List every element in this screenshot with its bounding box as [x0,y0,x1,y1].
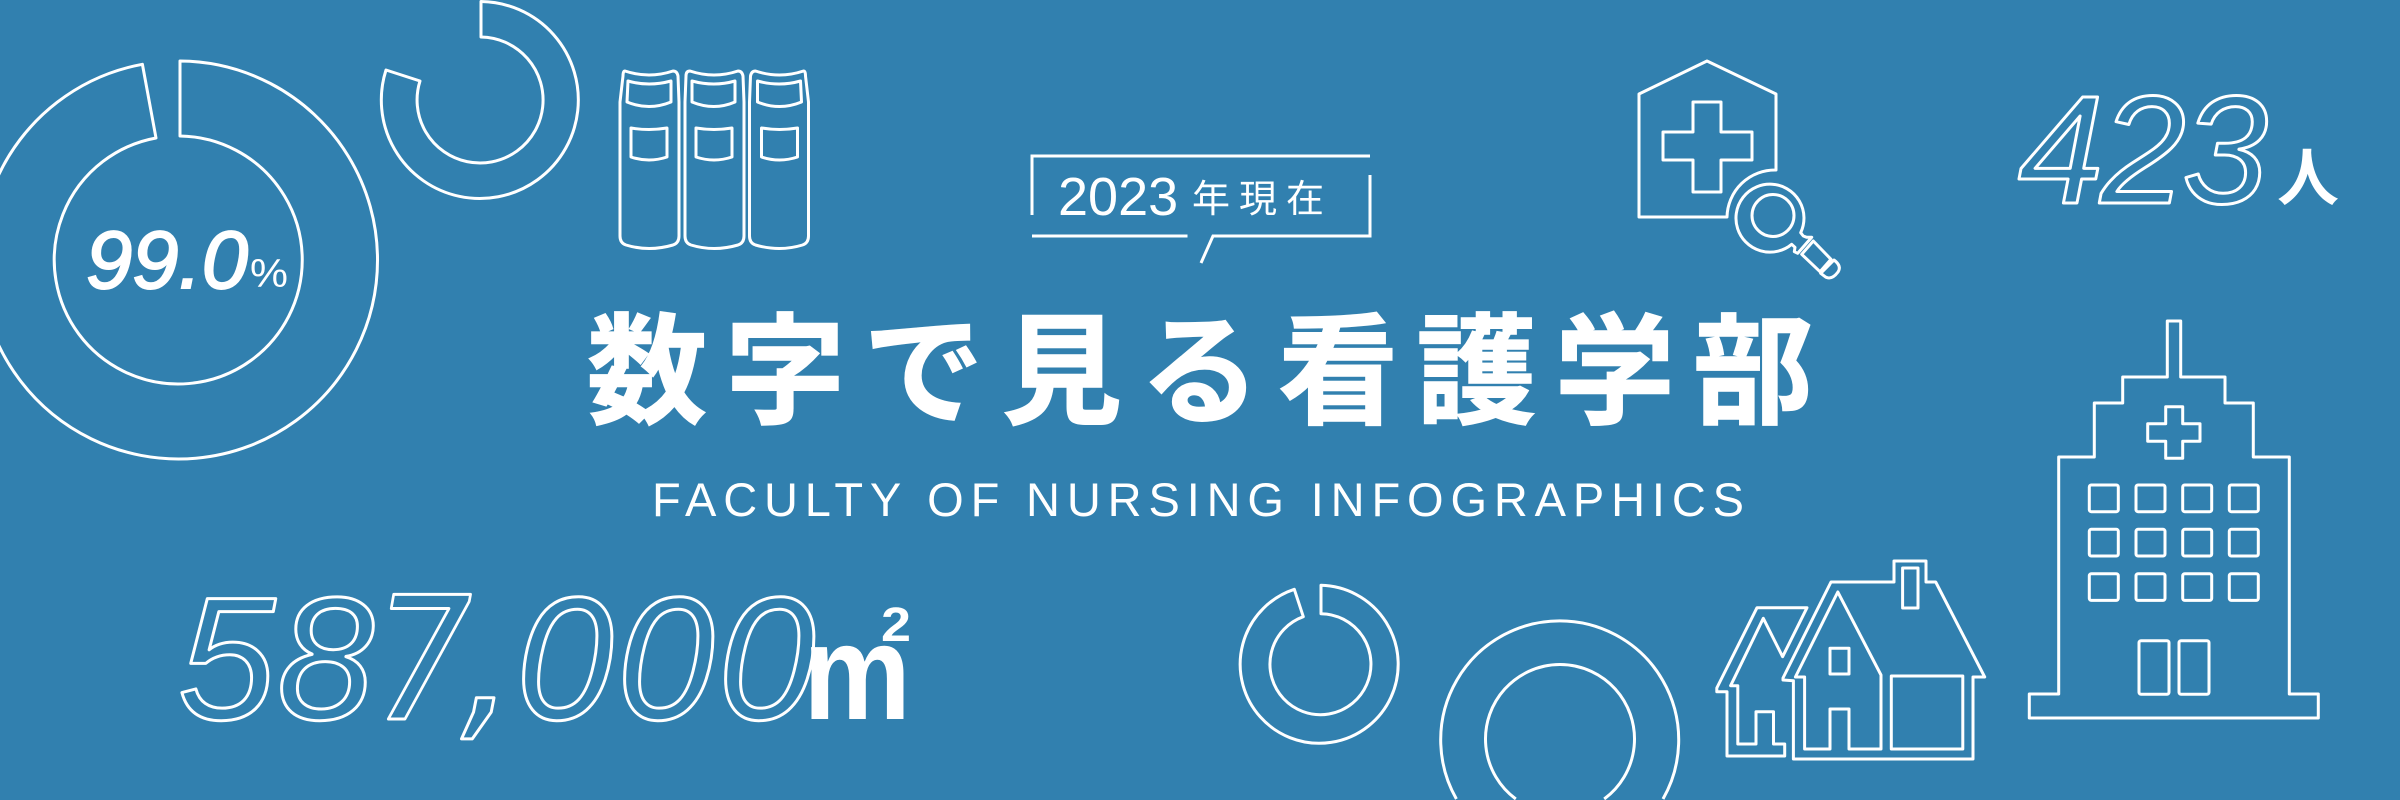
icon: hospital search [1639,61,1839,278]
stat: 99.0%: % [250,252,288,296]
subtitle: FACULTY OF NURSING INFOGRAPHICS [652,473,1744,526]
stat: 423 people: 人 [2277,145,2339,214]
donut chart: small bottom [1240,585,1398,743]
donut chart: small top [381,2,578,198]
title: 数字で見る看護学部 [587,306,1813,440]
year text [1058,167,1324,227]
icon: books [620,71,808,248]
stat: 423 people: 423 [2018,64,2268,236]
stat: 587,000 square metres: 2 [881,599,911,652]
donut chart: 99.0% [0,61,378,459]
speech bubble label: as of 2023 [1032,156,1370,263]
stat: 587,000 square metres: 58 [178,562,374,757]
stat: 587,000 square metres [178,561,911,760]
icon: houses [1717,561,1985,759]
stat: 587,000 square metres: 7 [374,561,472,760]
year text: 2023 [1058,167,1178,227]
stat: 587,000 square metres: , [461,561,515,760]
icon: hospital building [2029,321,2318,718]
ring chart: large bottom [1441,621,1679,799]
stat: 587,000 square metres: 000 [516,562,815,757]
stat: 99.0%: 99.0 [86,215,248,306]
year text: 年現在 [1192,179,1324,221]
stat: 587,000 square metres: m [803,596,911,748]
